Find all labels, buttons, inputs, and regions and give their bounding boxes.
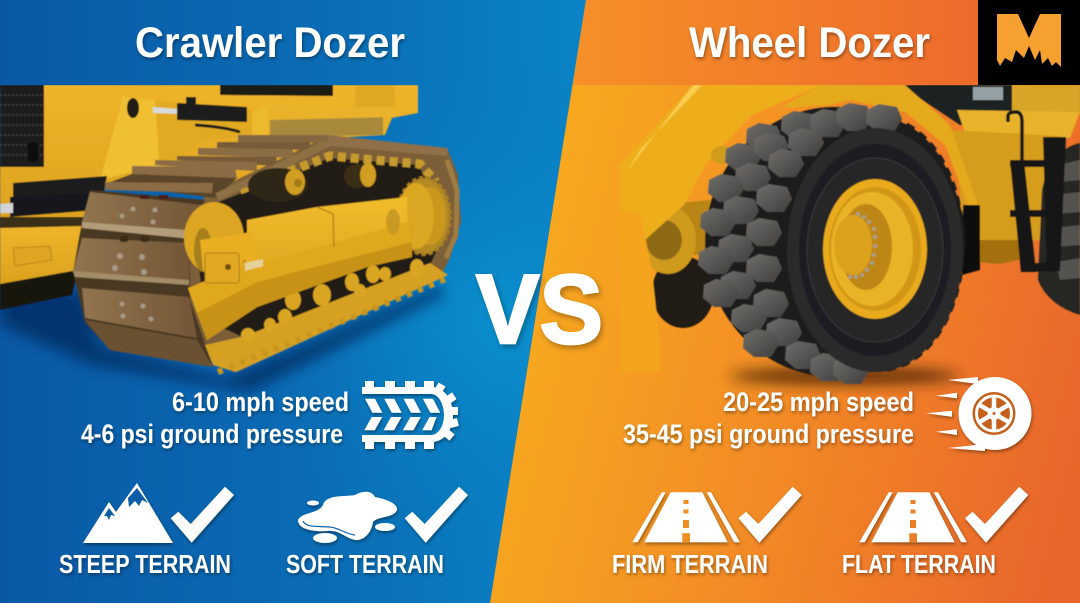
- terrain item: soft terrain: [286, 487, 468, 579]
- terrain item: steep terrain: [59, 483, 234, 579]
- stat: ground pressure: 4-6 psi ground pressure: [81, 419, 343, 449]
- heading: crawler dozer: Crawler Dozer: [135, 19, 405, 67]
- ladder: [1008, 112, 1066, 272]
- label: soft terrain: SOFT TERRAIN: [286, 549, 444, 579]
- icon: road: [859, 492, 967, 542]
- icon: speeding wheel: [926, 377, 1032, 451]
- lift bracket: [100, 97, 160, 180]
- icon: check: [965, 487, 1028, 543]
- terrain item: flat terrain: [842, 487, 1028, 579]
- ground shadow: [730, 367, 960, 385]
- dozer body: [0, 85, 418, 228]
- lower hydraulic cylinders: [0, 176, 107, 228]
- rear wheel right: [1038, 143, 1080, 315]
- panel: crawler dozer background: [0, 0, 586, 603]
- icon: mountains: [83, 483, 173, 543]
- carrier rollers: [248, 163, 376, 202]
- bucket edge: [626, 212, 660, 372]
- label: flat terrain: FLAT TERRAIN: [842, 549, 996, 579]
- track front shoes: [73, 190, 213, 367]
- front idler wheel: [184, 202, 244, 274]
- logo: [978, 0, 1080, 85]
- upper hydraulic cylinder: [153, 97, 247, 132]
- heading: wheel dozer: Wheel Dozer: [689, 19, 930, 67]
- icon: check: [171, 487, 234, 543]
- axle: [640, 200, 715, 274]
- bottom track run: [205, 259, 448, 372]
- wheel stats: [623, 387, 914, 449]
- tread blocks: [698, 103, 902, 384]
- sidewall: [787, 128, 963, 372]
- yellow rim: [823, 179, 927, 319]
- icon: check: [405, 487, 468, 543]
- big tire: [698, 103, 965, 384]
- terrain item: firm terrain: [612, 487, 802, 579]
- label: firm terrain: FIRM TERRAIN: [612, 549, 768, 579]
- VS label: VS: [476, 254, 603, 364]
- crawler track loop: [105, 135, 461, 372]
- stat: speed: 20-25 mph speed: [723, 387, 914, 417]
- icon: road: [632, 492, 740, 542]
- shadow under crawler: [0, 285, 445, 392]
- stat: speed: 6-10 mph speed: [172, 387, 349, 417]
- panel: wheel dozer background: [490, 0, 1080, 603]
- icon: check: [738, 487, 802, 543]
- blade arm: [0, 226, 84, 310]
- dozer body right: [900, 85, 1080, 275]
- rear wheel left: [652, 256, 714, 328]
- image: crawler dozer undercarriage: [0, 85, 461, 392]
- stat: ground pressure: 35-45 psi ground pressure: [623, 419, 914, 449]
- icon: puddle: [298, 492, 397, 543]
- loader arm: [620, 85, 978, 240]
- label: steep terrain: STEEP TERRAIN: [59, 549, 231, 579]
- crawler stats: [81, 387, 349, 449]
- engine grille: [0, 85, 44, 167]
- image: wheel dozer tire: [620, 85, 1080, 385]
- rear sprocket: [398, 178, 450, 254]
- track frame beam: [188, 197, 412, 340]
- top track plates: [238, 135, 328, 143]
- icon: crawler track: [362, 381, 459, 449]
